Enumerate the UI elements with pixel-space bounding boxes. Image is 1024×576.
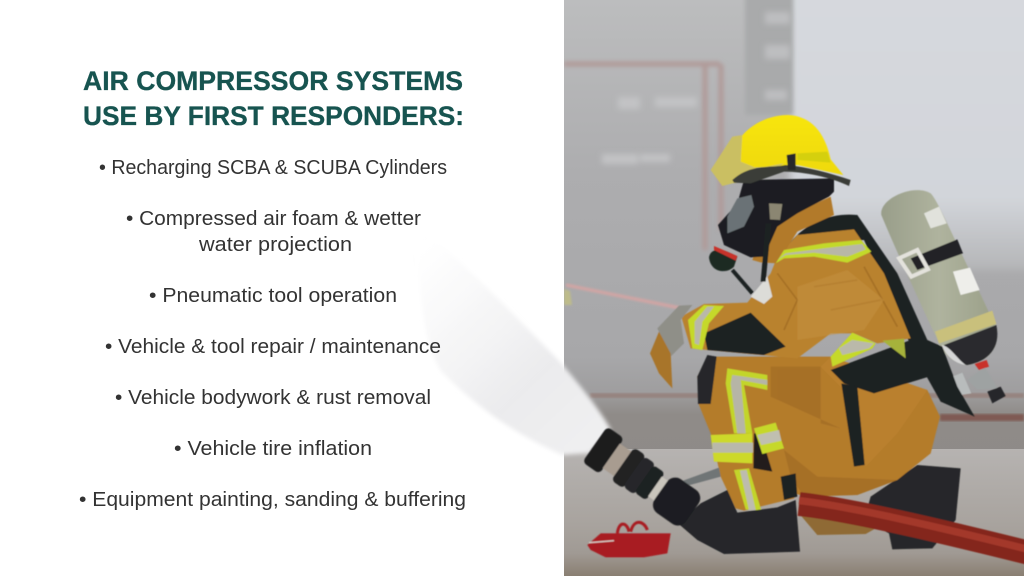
belt and strap (831, 340, 929, 467)
jacket (681, 229, 911, 358)
item: repair and maintenance: • Vehicle & tool repair / maintenance (105, 336, 441, 358)
bullet list (79, 157, 466, 511)
rear boot (864, 465, 961, 549)
item: compressed air foam: water projection (198, 234, 352, 256)
front boot (678, 490, 800, 554)
item: compressed air foam (126, 208, 421, 256)
item: painting: • Equipment painting, sanding & buffering (79, 489, 466, 511)
trousers (697, 357, 940, 511)
item: compressed air foam: • Compressed air foam & wetter (126, 208, 421, 230)
item: tire inflation: • Vehicle tire inflation (174, 438, 372, 460)
red strap on ground (587, 522, 671, 557)
jacket reflective stripes (688, 240, 906, 367)
air cylinder (881, 190, 997, 365)
item: recharging cylinders: • Recharging SCBA & SCUBA Cylinders (99, 157, 447, 179)
sleeve black patch (704, 313, 786, 355)
nozzle (582, 427, 721, 530)
regulator (952, 360, 1006, 403)
harness (785, 215, 975, 417)
item: bodywork: • Vehicle bodywork & rust removal (115, 387, 431, 409)
glove (650, 305, 692, 388)
title (83, 66, 464, 131)
mask and hood (709, 178, 834, 293)
firefighter illustration (582, 115, 1024, 557)
jacket collar (752, 197, 834, 263)
white text panel (0, 0, 564, 576)
item: pneumatic tool: • Pneumatic tool operation (149, 285, 397, 307)
icon: fire hose (799, 501, 1024, 555)
photo background: foggy industrial site (564, 0, 1024, 576)
title: AIR COMPRESSOR SYSTEMS (83, 66, 463, 96)
water spray from nozzle (415, 222, 611, 455)
title: USE BY FIRST RESPONDERS: (83, 101, 464, 131)
trouser reflective stripes (711, 368, 784, 511)
helmet (711, 115, 851, 186)
